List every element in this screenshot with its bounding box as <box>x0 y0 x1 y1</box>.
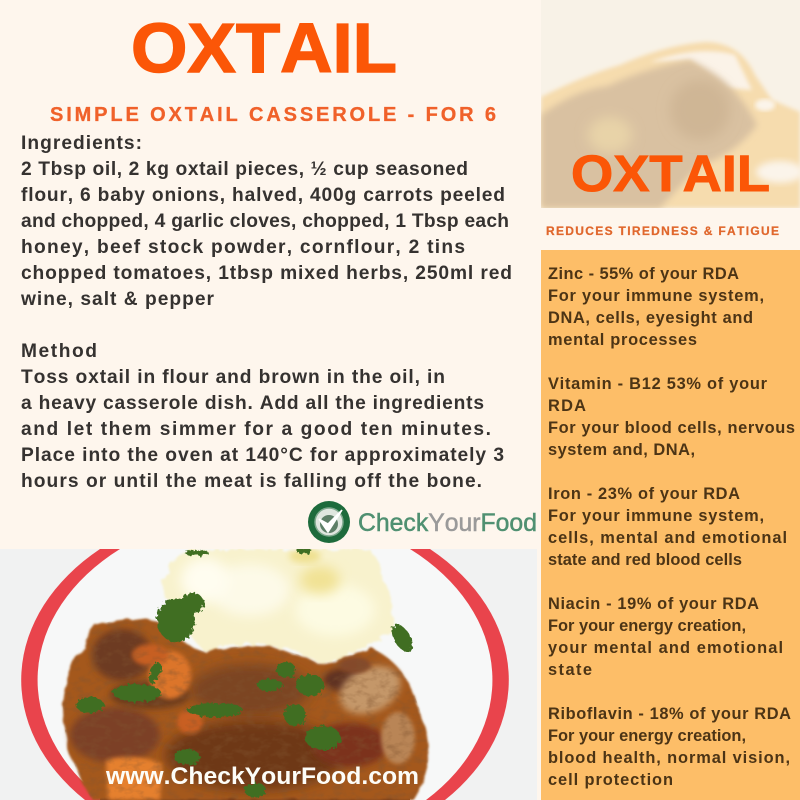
meat highlight pieces <box>336 662 404 718</box>
niacin <box>548 595 783 679</box>
ingredients text block: honey, beef stock powder, cornflour, 2 tins <box>21 237 465 258</box>
iron: Iron - 23% of your RDA <box>548 485 740 503</box>
faded meat <box>541 60 757 208</box>
faded sauce <box>541 42 800 208</box>
iron <box>548 485 787 569</box>
meat grain texture <box>63 619 428 800</box>
method text block: Place into the oven at 140°C for approximately 3 <box>21 445 504 466</box>
riboflavin <box>548 705 791 789</box>
title: OXTAIL <box>131 9 397 87</box>
iron: cells, mental and emotional <box>548 529 787 547</box>
tagline: REDUCES TIREDNESS & FATIGUE <box>546 224 779 238</box>
ingredients text block: wine, salt & pepper <box>20 289 215 310</box>
ingredients text block: flour, 6 baby onions, halved, 400g carrots peeled <box>21 185 505 206</box>
secondary title: OXTAIL <box>571 145 770 202</box>
logo wordmark: CheckYourFood <box>358 509 537 537</box>
method text block: and let them simmer for a good ten minutes. <box>21 419 491 440</box>
vitamin b12: RDA <box>548 397 586 415</box>
recipe subtitle: SIMPLE OXTAIL CASSEROLE - FOR 6 <box>50 104 496 126</box>
riboflavin: For your energy creation, <box>548 727 746 745</box>
stew <box>63 619 428 800</box>
niacin: Niacin - 19% of your RDA <box>548 595 759 613</box>
method text block: Toss oxtail in flour and brown in the oil, in <box>21 367 445 388</box>
vitamin b12: system and, DNA, <box>548 441 695 459</box>
iron: For your immune system, <box>548 507 764 525</box>
zinc: DNA, cells, eyesight and <box>548 309 753 327</box>
zinc: mental processes <box>548 331 697 349</box>
ingredients text block: Ingredients: <box>21 133 142 154</box>
ingredients text block: and chopped, 4 garlic cloves, chopped, 1 Tbsp each <box>21 211 509 232</box>
icon: check badge <box>308 501 350 543</box>
riboflavin: blood health, normal vision, <box>548 749 790 767</box>
riboflavin: Riboflavin - 18% of your RDA <box>548 705 791 723</box>
riboflavin: cell protection <box>548 771 673 789</box>
plate surface <box>38 549 492 800</box>
panel: nutrients <box>541 250 800 800</box>
mashed potato <box>163 549 392 664</box>
parsley garnish <box>76 548 416 797</box>
niacin: state <box>548 661 592 679</box>
method text block: a heavy casserole dish. Add all the ingredients <box>21 393 484 414</box>
method text block: hours or until the meat is falling off the bone. <box>21 471 482 492</box>
niacin: your mental and emotional <box>548 639 783 657</box>
carrots <box>149 651 191 699</box>
zinc: Zinc - 55% of your RDA <box>548 265 739 283</box>
niacin: For your energy creation, <box>548 617 746 635</box>
vitamin b12: For your blood cells, nervous <box>548 419 795 437</box>
food photo: oxtail stew on red-rimmed plate <box>0 548 537 800</box>
ingredients text block <box>20 133 512 310</box>
zinc: For your immune system, <box>548 287 764 305</box>
method text block <box>21 341 504 492</box>
logo: CheckYourFood <box>308 501 537 543</box>
iron: state and red blood cells <box>548 551 742 569</box>
faded oxtail photo <box>541 38 800 208</box>
plate rim <box>21 549 509 800</box>
method text block: Method <box>21 341 97 362</box>
website URL: www.CheckYourFood.com <box>105 763 419 790</box>
zinc <box>548 265 764 349</box>
vitamin b12: Vitamin - B12 53% of your <box>548 375 768 393</box>
ingredients text block: chopped tomatoes, 1tbsp mixed herbs, 250ml red <box>21 263 512 284</box>
ingredients text block: 2 Tbsp oil, 2 kg oxtail pieces, ½ cup seasoned <box>21 159 468 180</box>
vitamin b12 <box>548 375 795 459</box>
